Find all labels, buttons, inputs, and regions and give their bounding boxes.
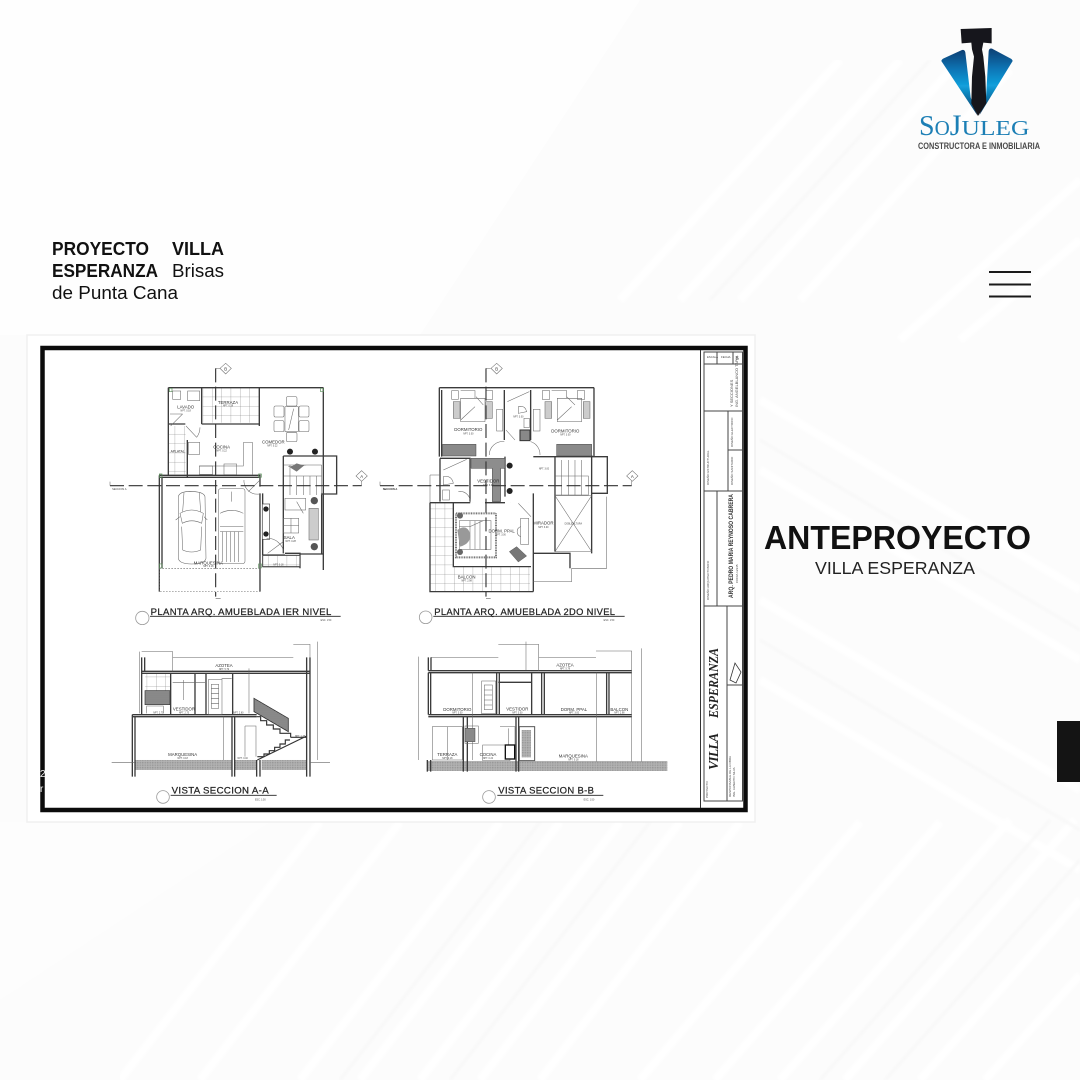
section labels: AZOTEA [215, 663, 233, 668]
floor plan: second level: NPT. 3.00 [513, 416, 524, 418]
floor plan: second level: NPT. 3.00 [483, 485, 494, 487]
floor plan: second level: MIRADOR [533, 521, 554, 526]
floor plan: second level: DOBLE ALTURA [565, 523, 582, 526]
project name: esperanza: ESPERANZA [706, 648, 721, 719]
title block: PROYECTO [705, 781, 709, 798]
section view B-B: BALCON [610, 707, 628, 712]
section view B-B: VESTIDOR [506, 706, 528, 711]
stray caption fragments: 2 [40, 769, 46, 780]
section view A-A: NPT. 0.40 [238, 758, 248, 760]
title block: CODIA 12345 [735, 564, 739, 583]
title block: DISEÑO ESTRUCTURAL [705, 450, 710, 485]
section lines [110, 484, 362, 487]
floor plan: first level: NPT. 0.18 [273, 564, 284, 566]
section title: VISTA SECCION B-B [498, 786, 594, 796]
subheading: villa esperanza: VILLA ESPERANZA [815, 558, 975, 578]
floor plan: first level: NPT. 0.18 [223, 406, 234, 408]
section view B-B: ESC. 1:50 [584, 799, 595, 801]
floor plan: first level: NPT. 0.18 [203, 566, 214, 568]
section view B-B [418, 642, 667, 803]
sheet black frame [42, 348, 746, 810]
floor plan: first level: NPT. 0.22 [267, 446, 278, 448]
master bedroom furniture [456, 513, 496, 557]
floor plan: first level: SECCION A [383, 487, 397, 491]
section view B-B: DORM. PPAL [561, 707, 588, 712]
floor plan: first level: COMEDOR [262, 440, 285, 445]
floor plan: second level: NPT. 3.00 [496, 535, 506, 537]
floor plan: first level: NPT. 0.28 [286, 541, 296, 543]
room labels: DORMITORIO [454, 427, 483, 432]
floor plan: second level: DORM. PPAL [488, 528, 515, 533]
plan title: PLANTA ARQ. AMUEBLADA 2DO NIVEL [434, 607, 615, 617]
floor plan: first level: SECCION A [112, 487, 127, 491]
section view B-B: NPT. 3.00 [512, 712, 523, 714]
section markers [491, 363, 638, 481]
icon: gavel and lapels [941, 28, 1013, 116]
floor plan: first level: A [360, 474, 363, 479]
stairs [284, 465, 322, 495]
logo: SoJuleg [918, 28, 1040, 151]
section view B-B: NPT. 0.22 [483, 758, 494, 760]
section view A-A: VESTIDOR [173, 706, 195, 711]
heading: project name [52, 239, 224, 303]
title block [700, 350, 742, 808]
floor plan: second level [380, 363, 638, 624]
floor plan: first level: ESC. 1:50 [321, 620, 332, 622]
title block: FECHA [721, 355, 731, 359]
title block: DISEÑO ELECTRICO [729, 417, 734, 447]
section lines [380, 484, 632, 487]
black side tab [1057, 721, 1080, 782]
section title: VISTA SECCION A-A [172, 786, 269, 796]
section view B-B: MARQUESINA [559, 753, 588, 758]
project name: villa: VILLA [706, 733, 721, 770]
logo tagline: CONSTRUCTORA E INMOBILIARIA [918, 141, 1040, 151]
section view A-A: ESC. 1:50 [255, 799, 266, 801]
heading: project name: PROYECTO [52, 239, 149, 259]
floor plan: first level: NPT. 0.22 [217, 451, 227, 453]
section view A-A: NPT. 5.79 [219, 669, 230, 671]
living room furniture [267, 498, 318, 553]
floor plan: second level: B [495, 366, 498, 371]
closets [443, 444, 476, 456]
section view B-B: NPT. 5.79 [560, 669, 571, 671]
section view A-A: NPT. 2.60 [233, 713, 244, 715]
icon: hamburger menu [989, 272, 1031, 296]
section labels: AZOTEA [556, 663, 574, 668]
floor plan: second level: VESTIDOR [477, 479, 499, 484]
section view B-B: NPT. 3.00 [452, 713, 463, 715]
floor plan: first level [110, 363, 397, 625]
title block: 5 [736, 356, 739, 362]
floor plan: first level: SALA [284, 535, 295, 540]
section view A-A: MARQUESINA [168, 752, 197, 757]
section view B-B: NPT. 0.18 [568, 759, 579, 761]
panel: architectural sheet [27, 335, 755, 822]
heading: anteproyecto: ANTEPROYECTO [764, 520, 1031, 557]
car [176, 491, 207, 564]
heading: project name: Brisas [172, 261, 224, 281]
title block: DISEÑO ARQUITECTONICO [705, 560, 710, 600]
title block: ESCALA [707, 355, 718, 359]
room fixtures [170, 391, 253, 475]
section view B-B: DORMITORIO [443, 707, 472, 712]
section view A-A [112, 642, 330, 803]
section view B-B: NPT. 2.98 [614, 713, 625, 715]
bedrooms [443, 391, 590, 500]
floor plan: second level: NPT. 3.00 [539, 468, 550, 470]
dining table [274, 397, 309, 442]
floor plan: first level: B [224, 366, 227, 371]
logo wordmark: SOJULEG [919, 109, 1029, 142]
floor plan: second level: ESC. 1:50 [604, 620, 615, 622]
floor plan: first level: COCINA [213, 445, 230, 450]
heading: project name: VILLA [172, 239, 224, 259]
title block: RESPONSABLE DE LA OBRA [728, 756, 732, 797]
room labels: LAVADO [177, 405, 195, 410]
stray caption fragments: r [40, 784, 44, 795]
heading: project name: ESPERANZA [52, 261, 158, 281]
title block: DISEÑO SANITARIO [729, 456, 734, 485]
section view B-B: NPT. 3.00 [569, 713, 580, 715]
floor plan: second level: NPT. 3.00 [463, 433, 474, 435]
plan title: PLANTA ARQ. AMUEBLADA IER NIVEL [151, 607, 332, 617]
section view B-B: COCINA [480, 752, 497, 757]
floor plan: first level: NPT. 0.18 [181, 410, 191, 412]
section view A-A: NPT. 0.18 [178, 758, 188, 760]
stairs and void [555, 460, 592, 552]
section view A-A: NPT. 2.75 [179, 712, 190, 714]
floor plan: second level: DORMITORIO [551, 428, 580, 433]
title block: ING. ALBERTO SILVA [732, 767, 736, 797]
truck [218, 489, 245, 564]
floor plan: second level: NPT. 2.98 [462, 581, 472, 583]
floor plan: first level: TERRAZA [218, 400, 238, 405]
floor plan: second level: SECCION A [383, 487, 397, 491]
floor plan: second level: NPT. 3.00 [560, 434, 571, 436]
floor plan: second level: BALCON [458, 575, 476, 580]
architect name: ARQ. PEDRO MARIA REYNOSO CABRERA [728, 494, 735, 598]
heading: project name: de Punta Cana [52, 283, 179, 303]
title block: ING. ANGELBLANCO TAPIA [734, 355, 739, 407]
stair and railing [254, 698, 288, 732]
section markers [220, 363, 367, 481]
floor plan: first level: APLATAL [171, 449, 185, 453]
section view A-A: NPT. 1.45 [295, 736, 306, 738]
floor plan: first level: MARQUESINA [194, 560, 223, 565]
section view A-A: NPT. 2.75 [153, 712, 164, 714]
floor plan: second level: NPT. 3.00 [538, 527, 549, 529]
stray caption fragments [40, 769, 46, 795]
floor plan: second level: A [631, 474, 634, 479]
title block: Y SECCIONES [729, 379, 734, 407]
section view B-B: NPT. 0.18 [442, 758, 453, 760]
section view B-B: TERRAZA [437, 752, 458, 757]
